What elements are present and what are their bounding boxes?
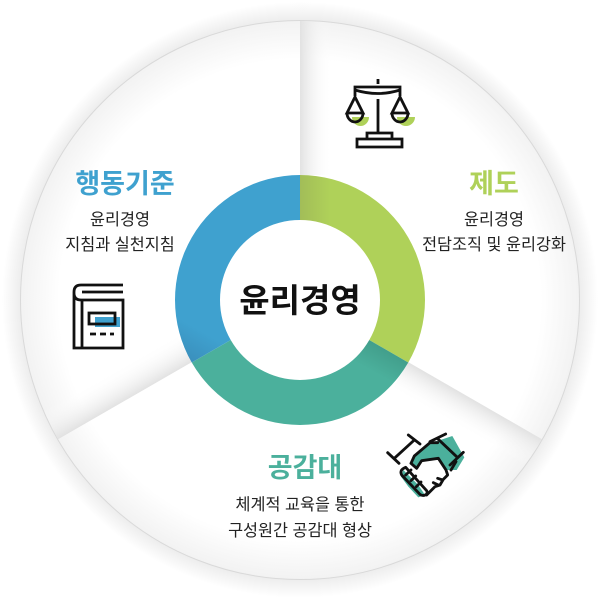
segment: blue [175,175,300,362]
center label: 윤리경영 [239,282,361,319]
text block: 전담조직 및 윤리강화 [422,236,566,254]
icon: book [74,285,123,348]
text block: 지침과 실천지침 [65,236,175,254]
icon: scales [347,79,415,147]
heading: 제도 [469,169,519,199]
panel: 공감대 [228,453,372,540]
segment: teal [192,340,408,425]
text block [422,211,566,254]
text block: 윤리경영 [90,211,150,229]
segment: green [300,175,425,362]
icon: handshake [388,434,464,497]
text block [228,496,372,540]
sector shadows [39,20,545,469]
text block: 구성원간 공감대 형상 [228,522,372,540]
heading: 공감대 [268,453,342,483]
panel: 제도 [422,169,566,254]
text block: 체계적 교육을 통한 [236,496,364,514]
panel: 행동기준 [65,169,175,254]
heading: 행동기준 [75,169,175,199]
text block [65,211,175,254]
donut chart [175,175,425,425]
text block: 윤리경영 [464,211,524,229]
